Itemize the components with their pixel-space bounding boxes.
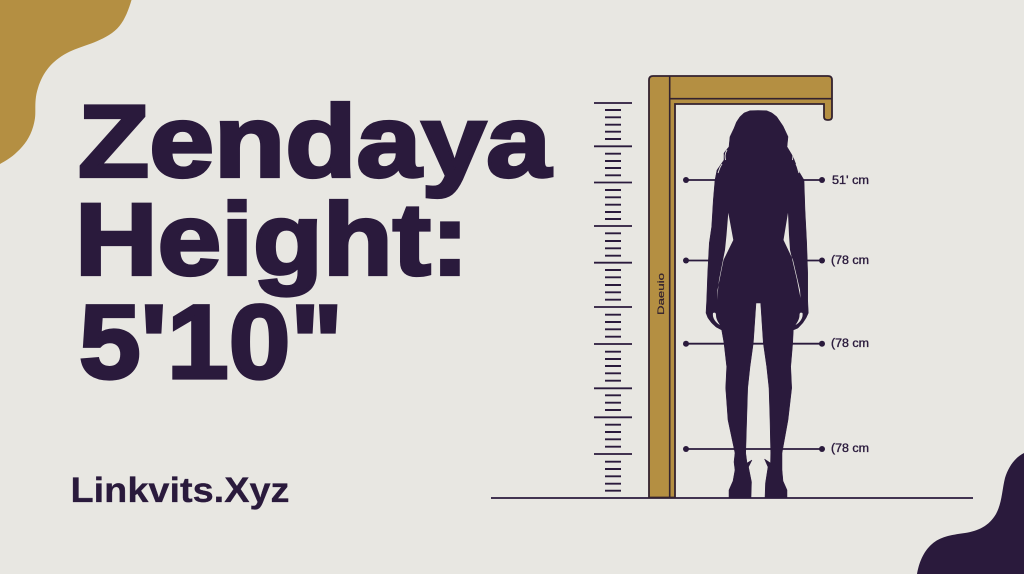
frame vertical label: Daeuio xyxy=(656,273,666,315)
measurement lines xyxy=(683,177,825,452)
label 3: (78 cm xyxy=(831,338,869,350)
line at hips xyxy=(683,258,825,264)
title line: Height: Height: xyxy=(75,182,469,296)
title line: 5'10": 5'10" xyxy=(79,284,343,401)
silhouette figure xyxy=(706,110,808,498)
ground line xyxy=(491,497,973,499)
frame inner lines xyxy=(670,76,832,498)
website label: Linkvits.Xyz xyxy=(70,471,290,510)
body xyxy=(706,110,808,498)
line at thighs xyxy=(683,341,825,347)
label 4: (78 cm xyxy=(831,443,869,455)
line at ankles xyxy=(683,446,825,452)
frame body xyxy=(649,76,832,498)
label 1: 51' cm xyxy=(832,175,869,187)
decorative purple corner blob xyxy=(917,453,1024,574)
label 2: (78 cm xyxy=(831,255,869,267)
arm gaps and highlights xyxy=(713,213,803,325)
short ticks xyxy=(605,110,621,491)
title xyxy=(75,84,552,401)
decorative gold corner blob xyxy=(0,0,132,164)
measurement labels xyxy=(831,175,869,455)
measuring frame xyxy=(649,76,832,498)
hair curl highlights xyxy=(718,150,799,173)
title line: Zendaya: Zendaya xyxy=(78,84,552,198)
line at shoulders xyxy=(683,177,825,183)
ruler scale xyxy=(594,103,632,491)
long ticks xyxy=(594,103,632,454)
